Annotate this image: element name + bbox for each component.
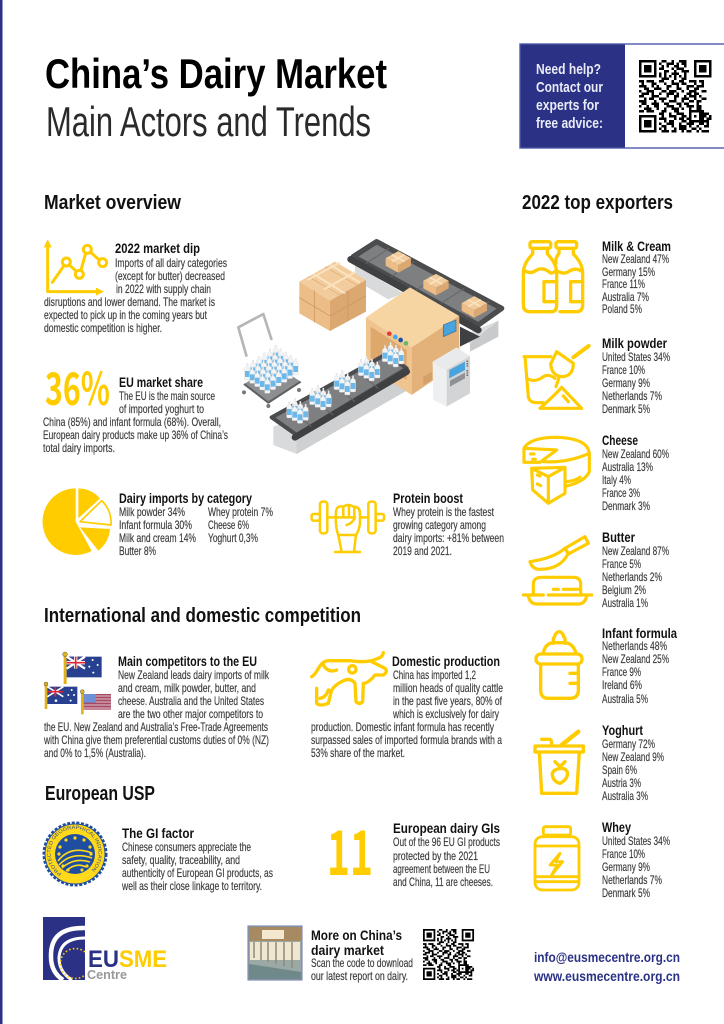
text block: whey exporters: Netherlands 7% (602, 873, 662, 887)
text block: more on China's dairy market (311, 927, 413, 983)
text block: protein boost: growing category among (393, 518, 486, 532)
text block: cheese exporters: Italy 4% (602, 473, 631, 487)
control panel (433, 347, 470, 407)
text block: main competitors: the EU. New Zealand and Australia’s Free-Trade Agreements (44, 720, 268, 734)
text block: cheese exporters: Denmark 3% (602, 499, 650, 513)
callout: need help box: experts for (536, 97, 599, 114)
logo: EU SME Centre (43, 917, 167, 982)
text block: GI factor: well as their close linkage to territory. (121, 879, 262, 893)
text block: 2022 market dip: domestic competition is higher. (44, 321, 162, 335)
pallet of boxes (299, 262, 366, 331)
text block: milk and cream exporters (602, 238, 671, 316)
text block: dairy imports by category (119, 490, 273, 558)
text block: infant formula exporters: Netherlands 48% (602, 639, 667, 653)
text block: 2022 market dip: 2022 market dip (115, 240, 200, 256)
text block: domestic production: China has imported 1,2 (393, 668, 476, 682)
text block: 2022 market dip: expected to pick up in the coming years but (44, 308, 207, 322)
text block: domestic production: production. Domestic infant formula has recently (311, 720, 494, 734)
text block: EU market share: of imported yoghurt to (119, 402, 204, 416)
text block: milk powder exporters: France 10% (602, 363, 645, 377)
text block: cheese exporters (602, 432, 669, 513)
text block: yoghurt exporters: Austria 3% (602, 776, 641, 790)
text block: more on China's dairy market: More on China’s (311, 927, 402, 943)
text block: protein boost: Whey protein is the fastest (393, 505, 494, 519)
icon: whey protein jar (535, 827, 579, 890)
front conveyor belt (272, 354, 407, 437)
text block: infant formula exporters: Ireland 6% (602, 678, 642, 692)
text block: infant formula exporters: Australia 5% (602, 692, 648, 706)
text block: domestic production: Domestic production (392, 653, 500, 669)
callout: need help box: Contact our (536, 79, 603, 96)
text block: GI factor: safety, quality, traceability, and (122, 853, 240, 867)
icon: protected geographical indication seal (42, 822, 108, 886)
text block: milk and cream exporters: France 11% (602, 277, 645, 291)
logo: EU SME Centre: Centre (87, 967, 127, 982)
text block: whey exporters: France 10% (602, 847, 645, 861)
text block: 2022 market dip: (except for butter) decreased (115, 269, 225, 283)
text block: protein boost: dairy imports: +81% between (393, 531, 504, 545)
text block: milk and cream exporters: New Zealand 47% (602, 252, 669, 266)
text block: EU market share: EU market share (119, 374, 203, 390)
text block: milk powder exporters: Milk powder (602, 335, 667, 351)
text block: butter exporters: New Zealand 87% (602, 544, 669, 558)
text block: domestic production: 53% share of the market. (311, 746, 405, 760)
text block: infant formula exporters: France 9% (602, 665, 641, 679)
cart (238, 314, 301, 408)
text block: European dairy GIs: and China, 11 are cheeses. (393, 875, 493, 889)
text block: protein boost (393, 490, 504, 558)
text block: European dairy GIs: protected by the 2021 (393, 849, 478, 863)
text block: 2022 market dip (44, 240, 227, 335)
text block: milk powder exporters: Netherlands 7% (602, 389, 662, 403)
text block: domestic production: million heads of quality cattle (393, 681, 503, 695)
text block: EU market share: European dairy products make up 36% of China’s (43, 428, 228, 442)
contact details: info@eusmecentre.org.cn (534, 949, 680, 965)
text block: infant formula exporters: Infant formula (602, 625, 677, 641)
text block: 2022 market dip: in 2022 with supply chain (116, 282, 211, 296)
text block: butter exporters: Butter (602, 529, 635, 545)
text block: 2022 market dip: Imports of all dairy categories (115, 256, 227, 270)
text block: milk powder exporters (602, 335, 670, 416)
text block: infant formula exporters: New Zealand 25% (602, 652, 669, 666)
text block: domestic production: which is exclusively for dairy (392, 707, 499, 721)
text block: GI factor (121, 825, 273, 893)
text block: whey exporters: Denmark 5% (602, 886, 650, 900)
photo: dairy production line (248, 926, 302, 980)
text block: protein boost: Protein boost (393, 490, 463, 506)
text block: butter exporters: Belgium 2% (602, 583, 646, 597)
text block: dairy imports by category: Milk and cream 14% (119, 531, 196, 545)
title (45, 50, 387, 145)
text block: protein boost: 2019 and 2021. (393, 544, 452, 558)
text block: whey exporters: Germany 9% (602, 860, 650, 874)
logo: EU SME Centre: SME (119, 946, 167, 973)
heading: European USP: European USP (45, 783, 155, 805)
icon: dumbbell and fist (312, 502, 384, 552)
text block: butter exporters: Australia 1% (602, 596, 648, 610)
text block: butter exporters: Netherlands 2% (602, 570, 662, 584)
contact details (533, 949, 680, 984)
text block: cheese exporters: Cheese (602, 432, 638, 448)
text block: European dairy GIs (393, 820, 500, 889)
text block: dairy imports by category: Whey protein 7% (208, 505, 273, 519)
text block: milk and cream exporters: Milk & Cream (602, 238, 671, 254)
text block: cheese exporters: France 3% (602, 486, 640, 500)
callout: need help box (520, 44, 724, 148)
text block: yoghurt exporters: Spain 6% (602, 763, 637, 777)
text block: more on China's dairy market: our latest report on dairy. (311, 969, 408, 983)
illustration: dairy factory conveyor (238, 242, 502, 454)
text block: main competitors: with China give them preferential customs duties of 0% (NZ) (43, 733, 269, 747)
text block: more on China's dairy market: dairy market (311, 942, 384, 958)
text block: main competitors: New Zealand leads dairy imports of milk (118, 668, 270, 682)
text block: cheese exporters: New Zealand 60% (602, 447, 669, 461)
text block: milk powder exporters: Denmark 5% (602, 402, 650, 416)
text block: milk powder exporters: United States 34% (602, 350, 670, 364)
text block: EU market share: total dairy imports. (43, 441, 115, 455)
text block: GI factor: authenticity of European GI products, as (122, 866, 273, 880)
back conveyor (351, 242, 502, 352)
text block: EU market share (43, 374, 228, 455)
icon: milk bottles (523, 242, 583, 312)
text block: EU market share: The EU is the main source (119, 389, 215, 403)
text block: main competitors: Main competitors to the EU (118, 653, 257, 669)
text block: domestic production: in the past five years, 80% of (393, 694, 502, 708)
text block: yoghurt exporters: Australia 3% (602, 789, 648, 803)
text block: dairy imports by category: Cheese 6% (208, 518, 249, 532)
text block: yoghurt exporters (602, 722, 664, 803)
text block: dairy imports by category: Milk powder 34% (119, 505, 185, 519)
text block: dairy imports by category: Infant formula 30% (119, 518, 192, 532)
icon: butter (523, 537, 592, 604)
machine (366, 287, 459, 395)
text block: main competitors: and 0% to 1,5% (Australia). (44, 746, 146, 760)
text block: yoghurt exporters: Yoghurt (602, 722, 643, 738)
text block: GI factor: The GI factor (122, 825, 194, 841)
icon: cheese (524, 437, 589, 503)
text block: main competitors: are the two other major competitors to (118, 707, 263, 721)
bottles on belt (287, 399, 308, 423)
callout: need help box: free advice: (536, 115, 603, 132)
heading: international and domestic competition: International and domestic competition (44, 605, 361, 627)
text block: main competitors: cheese. Australia and the United States (118, 694, 264, 708)
text block: dairy imports by category: Dairy imports by category (119, 490, 252, 506)
front conveyor base (273, 377, 407, 454)
text block: European dairy GIs: Out of the 96 EU GI products (393, 835, 500, 849)
text block: main competitors: and cream, milk powder, butter, and (118, 681, 256, 695)
logo: EU SME Centre: EU (88, 946, 119, 973)
text block: milk and cream exporters: Australia 7% (602, 290, 649, 304)
heading: market overview: Market overview (44, 192, 181, 214)
text block: milk and cream exporters: Poland 5% (602, 302, 642, 316)
icon: baby bottle (536, 632, 582, 698)
text block: milk powder exporters: Germany 9% (602, 376, 650, 390)
text block: EU market share: China (85%) and infant formula (68%). Overall, (43, 415, 221, 429)
text block: milk and cream exporters: Germany 15% (602, 265, 655, 279)
icon: line chart (44, 239, 107, 296)
heading: top exporters: 2022 top exporters (522, 192, 673, 214)
text block: European dairy GIs: European dairy GIs (393, 820, 500, 836)
text block: whey exporters (602, 819, 670, 900)
title: China’s Dairy Market (45, 50, 387, 97)
contact details: www.eusmecentre.org.cn (533, 968, 680, 984)
big number: 11: 11 (327, 803, 373, 893)
text block: dairy imports by category: Butter 8% (119, 544, 156, 558)
text block: yoghurt exporters: New Zealand 9% (602, 750, 664, 764)
text block: main competitors (43, 653, 270, 760)
icon: flags (44, 652, 111, 714)
text block: yoghurt exporters: Germany 72% (602, 737, 655, 751)
text block: infant formula exporters (602, 625, 677, 706)
boxes on back conveyor (386, 251, 411, 273)
text block: butter exporters (602, 529, 669, 610)
big number: 36%: 36% (45, 353, 110, 418)
text block: more on China's dairy market: Scan the code to download (311, 956, 413, 970)
text block: cheese exporters: Australia 13% (602, 460, 653, 474)
text block: butter exporters: France 5% (602, 557, 641, 571)
callout: need help box: Need help? (536, 61, 601, 78)
text block: dairy imports by category: Yoghurt 0,3% (208, 531, 258, 545)
text block: European dairy GIs: agreement between the EU (393, 862, 490, 876)
text block: whey exporters: United States 34% (602, 834, 670, 848)
QR code: report download (423, 929, 474, 980)
icon: yoghurt cup (535, 732, 583, 793)
chart: pie of dairy imports (43, 488, 111, 555)
text block: GI factor: Chinese consumers appreciate the (122, 840, 251, 854)
icon: protected geographical indication seal: PROTECTED GEOGRAPHICAL INDICATION (46, 826, 102, 876)
icon: cow (312, 653, 386, 705)
text block: 2022 market dip: disruptions and lower demand. The market is (44, 295, 215, 309)
title: Main Actors and Trends (46, 98, 371, 145)
text block: domestic production: surpassed sales of imported formula brands with a (311, 733, 502, 747)
icon: milk powder (524, 346, 589, 408)
text block: whey exporters: Whey (602, 819, 631, 835)
text block: domestic production (311, 653, 503, 760)
page edge strip (0, 0, 2, 1024)
